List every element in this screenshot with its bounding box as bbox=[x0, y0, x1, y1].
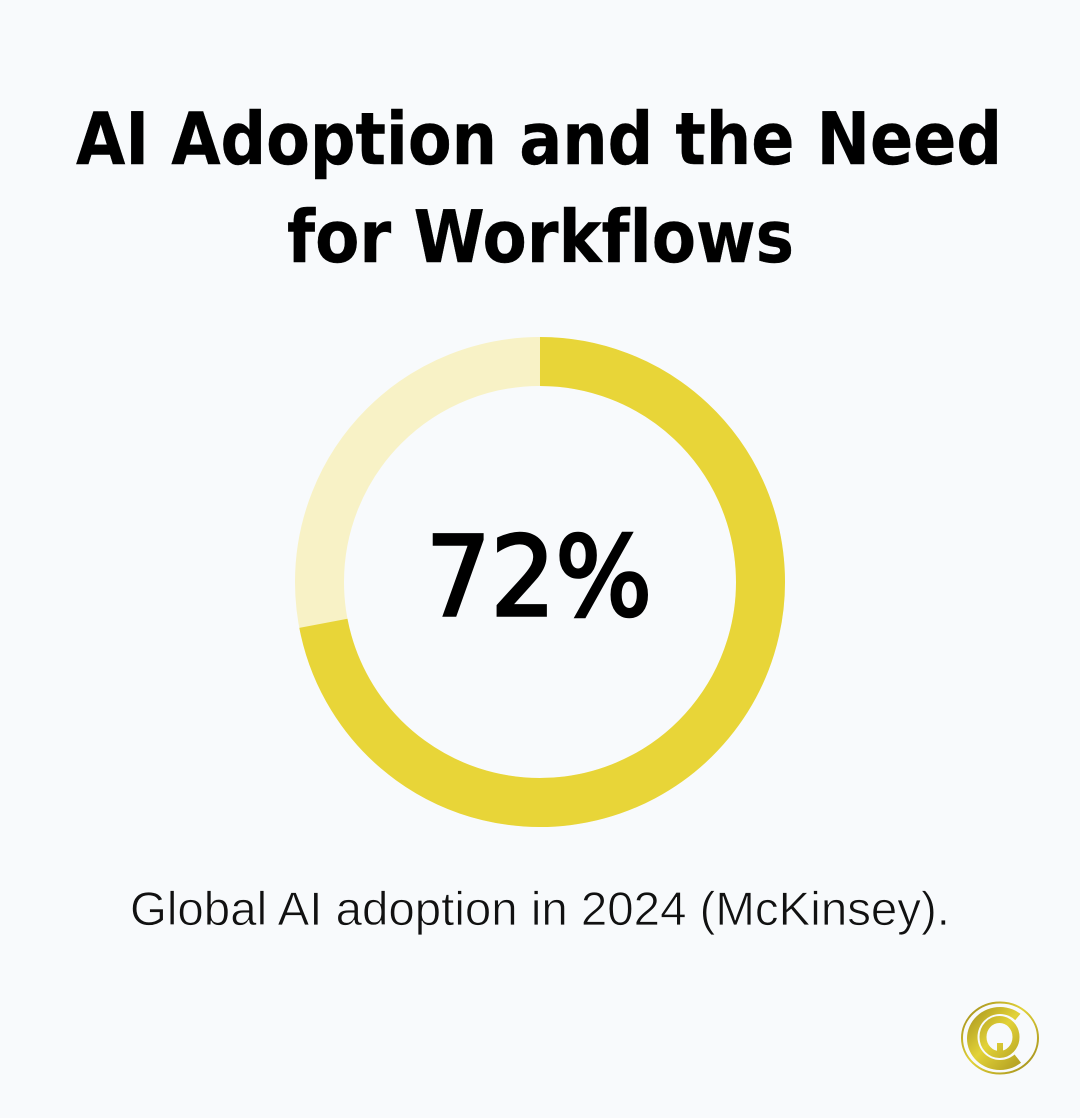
donut value: 72% bbox=[426, 513, 652, 641]
donut chart: 72% bbox=[320, 362, 760, 802]
title: for Workflows bbox=[287, 195, 794, 279]
title bbox=[76, 97, 1002, 279]
caption: Global AI adoption in 2024 (McKinsey). bbox=[130, 882, 950, 935]
icon: logo bbox=[962, 1002, 1038, 1074]
